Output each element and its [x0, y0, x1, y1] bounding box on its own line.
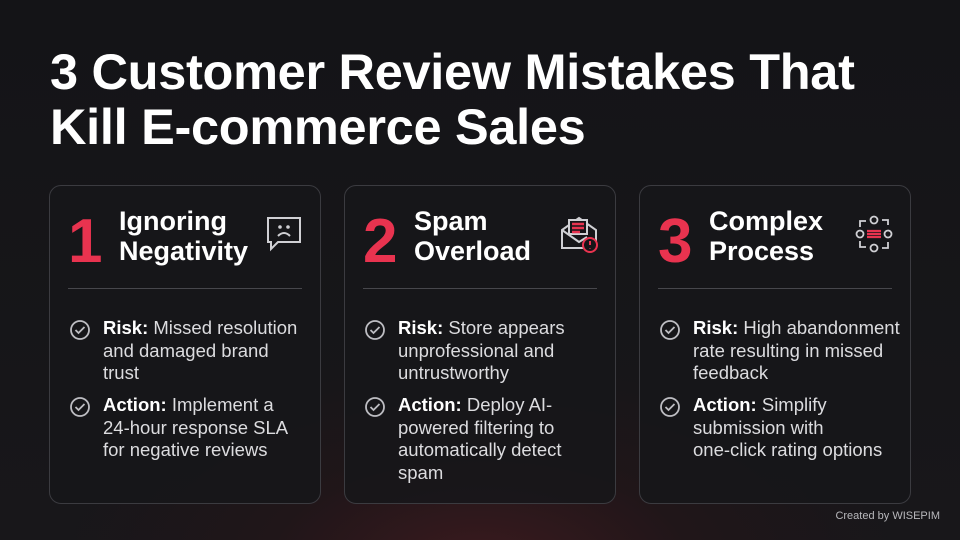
action: powered filtering to: [398, 416, 554, 438]
risk: unprofessional and: [398, 340, 554, 360]
panel: spam overload: [344, 185, 616, 504]
action: [365, 394, 562, 483]
number 3: 3: [658, 207, 692, 276]
number 2: 2: [363, 207, 397, 276]
action: for negative reviews: [103, 439, 268, 460]
action: automatically detect: [398, 439, 562, 460]
heading: Spam: [414, 206, 488, 236]
panel: ignoring negativity: [49, 185, 321, 504]
risk: [70, 317, 297, 383]
action: Action: Deploy AI-: [398, 394, 552, 415]
heading: [414, 206, 531, 266]
heading: Negativity: [119, 236, 248, 266]
risk: Risk: Missed resolution: [103, 317, 297, 338]
heading: [709, 206, 823, 266]
credit: Created by WISEPIM: [835, 510, 940, 522]
action: [70, 394, 288, 460]
icon: process cycle: [856, 216, 892, 252]
heading: Ignoring: [119, 206, 227, 236]
risk: and damaged brand: [103, 340, 269, 360]
action: [660, 394, 882, 460]
action: spam: [398, 462, 443, 482]
heading: [119, 206, 248, 266]
icon: envelope alert: [561, 216, 598, 253]
risk: [660, 317, 900, 383]
number 1: 1: [68, 207, 102, 276]
action: Action: Implement a: [103, 394, 274, 415]
heading: Process: [709, 236, 814, 266]
title: [50, 43, 855, 155]
risk: trust: [103, 362, 139, 383]
icon: sad speech bubble: [267, 217, 301, 252]
action: submission with: [693, 416, 824, 438]
panel: complex process: [639, 185, 911, 504]
risk: [365, 317, 565, 383]
risk: Risk: High abandonment: [693, 317, 900, 338]
action: one-click rating options: [693, 439, 882, 460]
risk: Risk: Store appears: [398, 317, 565, 338]
heading: Complex: [709, 206, 823, 236]
title: Kill E-commerce Sales: [50, 98, 585, 155]
title: 3 Customer Review Mistakes That: [50, 43, 855, 100]
action: Action: Simplify: [693, 394, 827, 415]
risk: feedback: [693, 362, 768, 383]
heading: Overload: [414, 236, 531, 266]
risk: rate resulting in missed: [693, 340, 883, 360]
risk: untrustworthy: [398, 362, 509, 383]
action: 24-hour response SLA: [103, 416, 288, 438]
